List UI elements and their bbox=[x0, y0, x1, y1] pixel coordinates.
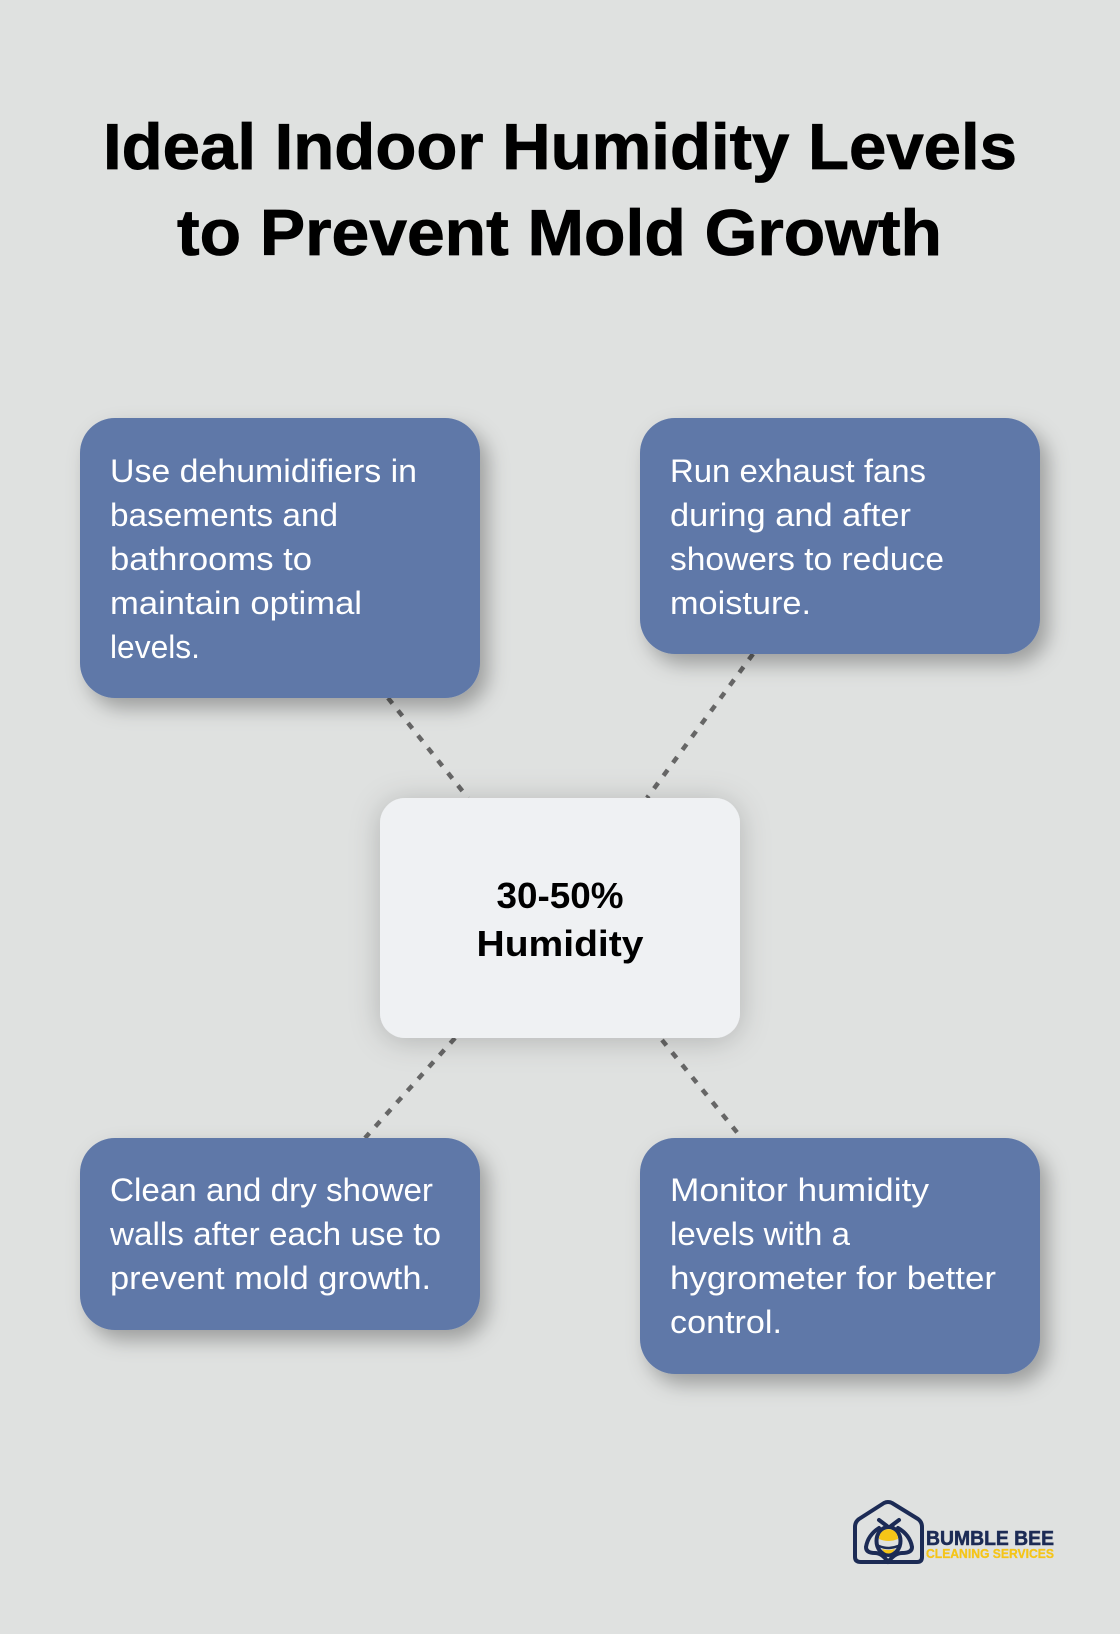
dashed connector: bottom-right card to center bbox=[662, 1040, 740, 1136]
card text: showers to reduce bbox=[670, 541, 944, 577]
card text: levels with a bbox=[670, 1216, 851, 1252]
card background bbox=[640, 1138, 1040, 1374]
panel: center humidity target bbox=[380, 798, 740, 1038]
logo wordmark: BUMBLE BEE bbox=[926, 1528, 1054, 1550]
card text: moisture. bbox=[670, 585, 811, 621]
card text bbox=[670, 1172, 996, 1340]
card background bbox=[640, 418, 1040, 654]
card text: levels. bbox=[110, 629, 200, 665]
card background bbox=[80, 1138, 480, 1330]
panel: exhaust fans tip bbox=[640, 418, 1040, 654]
center card text: 30-50% bbox=[496, 875, 624, 916]
card text bbox=[110, 453, 417, 665]
center card text bbox=[476, 875, 644, 964]
icon: house with bee bbox=[855, 1502, 922, 1562]
center card text: Humidity bbox=[476, 923, 644, 964]
title bbox=[103, 110, 1017, 269]
center card background bbox=[380, 798, 740, 1038]
title: to Prevent Mold Growth bbox=[177, 196, 942, 269]
card text: basements and bbox=[110, 497, 338, 533]
logo: Bumble Bee Cleaning Services bbox=[855, 1502, 1054, 1562]
title: Ideal Indoor Humidity Levels bbox=[103, 110, 1017, 183]
dashed connector: bottom-left card to center bbox=[365, 1038, 455, 1138]
panel: hygrometer tip bbox=[640, 1138, 1040, 1374]
dashed connector: top-right card to center bbox=[647, 654, 753, 798]
card text: hygrometer for better bbox=[670, 1260, 996, 1296]
panel: shower walls tip bbox=[80, 1138, 480, 1330]
card text: during and after bbox=[670, 497, 911, 533]
card text bbox=[109, 1172, 441, 1296]
card text: walls after each use to bbox=[109, 1216, 441, 1252]
dashed connector: top-left card to center bbox=[388, 698, 468, 798]
card text: Use dehumidifiers in bbox=[110, 453, 417, 489]
card text bbox=[670, 453, 944, 621]
card text: Clean and dry shower bbox=[110, 1172, 433, 1208]
card text: bathrooms to bbox=[110, 541, 312, 577]
card text: control. bbox=[670, 1304, 782, 1340]
card text: Run exhaust fans bbox=[670, 453, 926, 489]
card text: maintain optimal bbox=[110, 585, 362, 621]
card text: prevent mold growth. bbox=[110, 1260, 431, 1296]
logo tagline: CLEANING SERVICES bbox=[926, 1547, 1054, 1561]
card text: Monitor humidity bbox=[670, 1172, 930, 1208]
card background bbox=[80, 418, 480, 698]
panel: dehumidifiers tip bbox=[80, 418, 480, 698]
